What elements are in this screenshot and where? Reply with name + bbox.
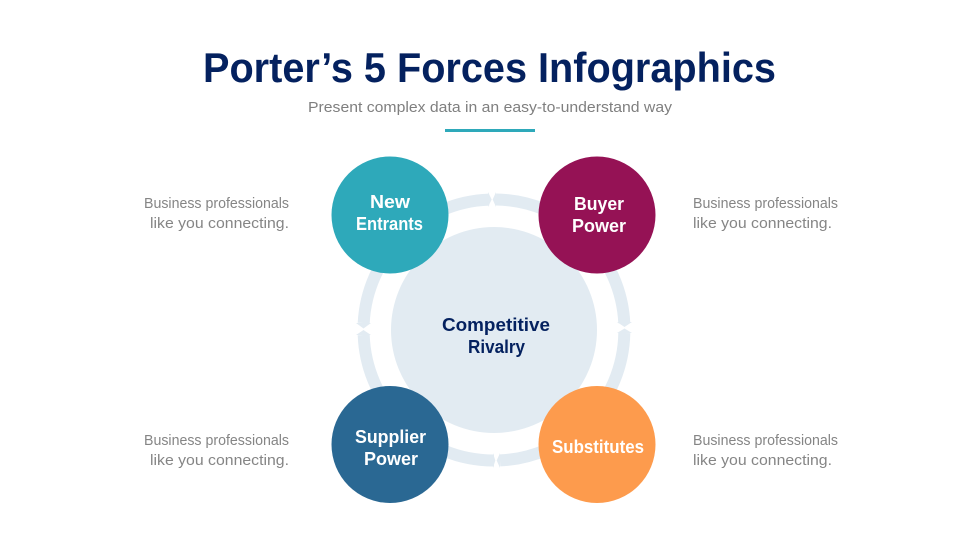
center circle: competitive rivalry: [391, 227, 597, 433]
circle: new entrants: New: [370, 191, 411, 212]
circle: substitutes: Substitutes: [552, 436, 644, 457]
text block: top right: like you connecting.: [693, 215, 832, 232]
cycle ring arrows: [356, 192, 632, 468]
circle: buyer power: [538, 156, 656, 274]
title accent line: [445, 129, 535, 132]
text block: top left: [144, 195, 289, 232]
circle: supplier power: Power: [364, 448, 418, 469]
circle: new entrants: Entrants: [356, 213, 423, 234]
title: Porter’s 5 Forces Infographics: [203, 44, 776, 91]
text block: top left: like you connecting.: [150, 215, 289, 232]
text block: bottom left: Business professionals: [144, 432, 289, 449]
circle: buyer power: Buyer: [574, 193, 624, 214]
text block: bottom right: like you connecting.: [693, 452, 832, 469]
text block: bottom left: [144, 432, 289, 469]
text block: top left: Business professionals: [144, 195, 289, 212]
text block: top right: Business professionals: [693, 195, 838, 212]
center circle: competitive rivalry: Competitive: [442, 314, 550, 335]
subtitle: Present complex data in an easy-to-understand way: [308, 99, 673, 116]
circle: buyer power: Power: [572, 215, 626, 236]
text block: bottom right: Business professionals: [693, 432, 838, 449]
circle: supplier power: Supplier: [355, 426, 426, 447]
circle: supplier power: [332, 386, 448, 503]
center circle: competitive rivalry: Rivalry: [468, 336, 526, 357]
text block: bottom right: [693, 432, 838, 469]
text block: top right: [693, 195, 838, 232]
text block: bottom left: like you connecting.: [150, 452, 289, 469]
circle: substitutes: [538, 386, 656, 503]
circle: new entrants: [332, 156, 448, 274]
